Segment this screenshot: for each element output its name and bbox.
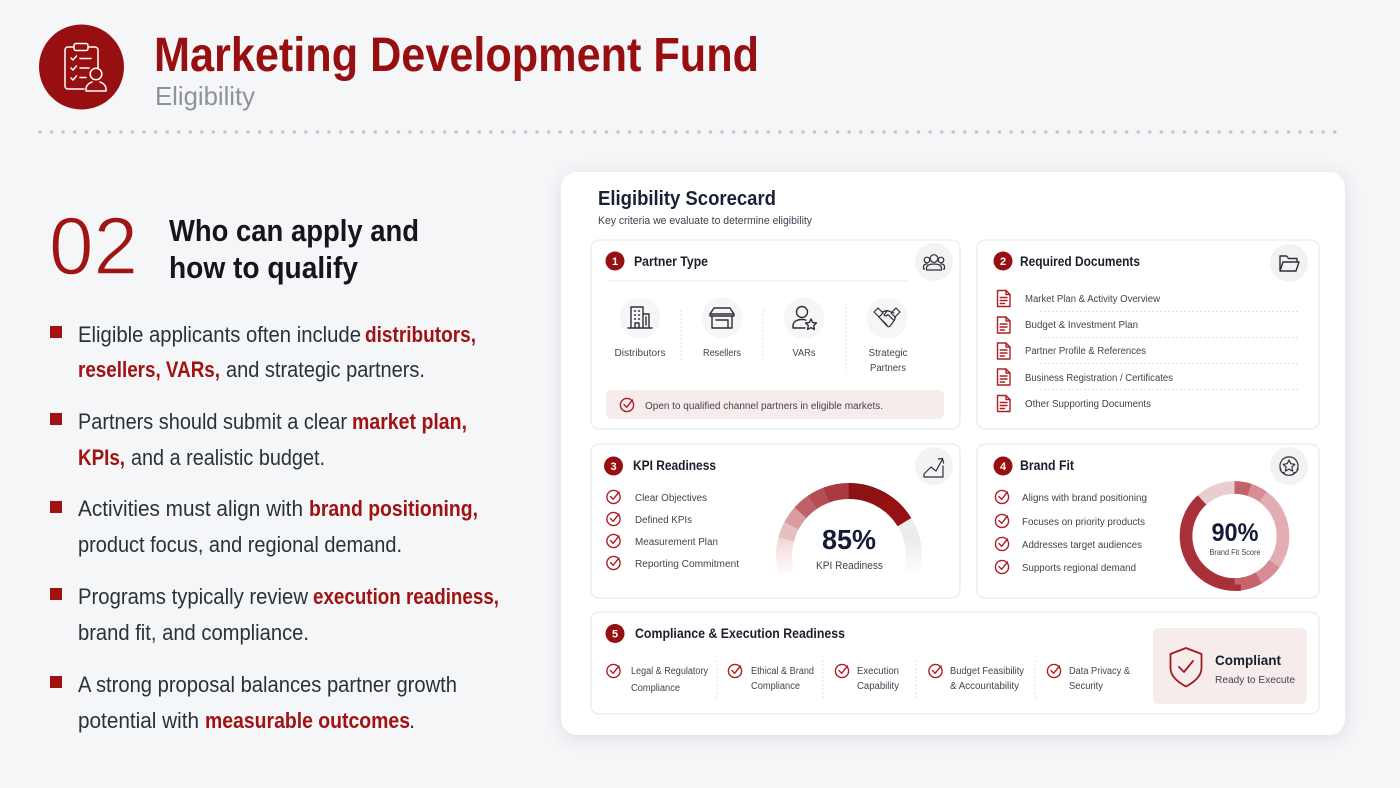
bullet 2: [50, 409, 467, 470]
bullet 5: A strong proposal balances partner growth: [78, 672, 457, 697]
document list: Partner Profile & References: [1025, 346, 1146, 357]
icon: folder: [1270, 244, 1308, 282]
badge 3: [604, 456, 623, 476]
panel: required documents: [977, 240, 1319, 429]
donut: 90% brand fit score: Brand Fit Score: [1210, 548, 1261, 557]
bullet 1: and strategic partners.: [226, 357, 425, 382]
bullet 2: KPIs,: [78, 445, 125, 470]
criterion: data privacy: [1047, 664, 1130, 692]
criterion: data privacy: Security: [1069, 681, 1103, 692]
bullet 1: [50, 322, 476, 382]
criterion: ethical and brand: Ethical & Brand: [751, 666, 814, 677]
bullet 4: Programs typically review: [78, 584, 308, 609]
bullet 4: execution readiness,: [313, 584, 499, 609]
partner: VARs: [784, 298, 824, 359]
badge 2: [994, 252, 1012, 270]
badge 5: [606, 624, 624, 643]
badge 3: 3: [610, 461, 617, 473]
panel: eligibility scorecard: [561, 172, 1345, 735]
partner: strategic partners: [866, 298, 908, 374]
badge 1: 1: [612, 256, 618, 268]
brand fit checklist: Addresses target audiences: [1022, 540, 1142, 551]
title: Marketing Development Fund: [154, 29, 759, 82]
brand fit checklist: [995, 490, 1147, 574]
KPI checklist: Measurement Plan: [635, 537, 718, 548]
badge 2: 2: [1000, 256, 1006, 268]
panel: brand fit: [977, 444, 1319, 598]
document list: Other Supporting Documents: [1025, 399, 1151, 410]
document list: [998, 290, 1173, 412]
bullet 5: measurable outcomes: [205, 708, 410, 733]
callout: compliant: [1153, 628, 1307, 704]
bullet 3: brand positioning,: [309, 496, 478, 521]
criterion: budget feasibility: Budget Feasibility: [950, 666, 1024, 677]
bullet 3: Activities must align with: [78, 496, 303, 521]
icon: shield: [1170, 648, 1202, 686]
brand fit checklist: Focuses on priority products: [1022, 517, 1145, 528]
brand fit checklist: Aligns with brand positioning: [1022, 493, 1147, 504]
partner: resellers: Resellers: [703, 348, 741, 359]
bullet 1: distributors,: [365, 322, 476, 347]
badge 4: 4: [1000, 461, 1007, 473]
badge 1: [606, 252, 624, 270]
bullet 3: product focus, and regional demand.: [78, 532, 402, 557]
criterion: legal and regulatory: Legal & Regulatory: [631, 666, 708, 677]
partner: strategic partners: Strategic: [868, 348, 908, 359]
criterion: budget feasibility: & Accountability: [950, 681, 1019, 692]
callout: open to qualified partners: [606, 390, 944, 419]
section heading: [169, 213, 419, 285]
required documents heading: Required Documents: [1020, 254, 1140, 269]
panel: KPI readiness: [591, 444, 960, 621]
criterion: ethical and brand: [728, 664, 814, 692]
section number: 02: [49, 201, 138, 292]
criterion: legal and regulatory: [607, 664, 708, 694]
partner: strategic partners: Partners: [870, 363, 906, 374]
scorecard subtitle: Key criteria we evaluate to determine eligibility: [598, 215, 812, 227]
bullet 2: and a realistic budget.: [131, 445, 325, 470]
section heading: how to qualify: [169, 250, 359, 285]
panel: partner type: [591, 240, 960, 429]
badge 5: 5: [612, 628, 618, 640]
bullet 4: brand fit, and compliance.: [78, 620, 309, 645]
donut: 90% brand fit score: 90%: [1212, 519, 1258, 547]
scorecard title: Eligibility Scorecard: [598, 188, 776, 210]
icon: star badge: [1270, 447, 1308, 485]
criterion: budget feasibility: [929, 664, 1024, 692]
subtitle: Eligibility: [155, 81, 255, 111]
icon: people: [915, 243, 953, 281]
bullet 2: Partners should submit a clear: [78, 409, 347, 434]
partner: distributors: Distributors: [614, 348, 666, 359]
criterion: execution capability: [835, 664, 899, 692]
document list: Budget & Investment Plan: [1025, 320, 1138, 331]
donut: 90% brand fit score: [1186, 488, 1283, 584]
bullet 5: potential with: [78, 708, 199, 733]
bullet 3: [50, 496, 478, 557]
KPI checklist: [607, 490, 739, 570]
header icon: clipboard with checklist and person: [39, 24, 124, 110]
criterion: ethical and brand: Compliance: [751, 681, 800, 692]
brand fit heading: Brand Fit: [1020, 458, 1074, 473]
bullet 1: Eligible applicants often include: [78, 322, 361, 347]
criterion: execution capability: Capability: [857, 681, 899, 692]
bullet 1: resellers, VARs,: [78, 357, 220, 382]
criterion: execution capability: Execution: [857, 666, 899, 677]
KPI checklist: Clear Objectives: [635, 493, 707, 504]
KPI readiness heading: KPI Readiness: [633, 458, 716, 473]
bullet list: [50, 322, 499, 733]
document list: Market Plan & Activity Overview: [1025, 294, 1161, 305]
brand fit checklist: Supports regional demand: [1022, 563, 1136, 574]
callout: open to qualified partners: Open to qualified channel partners in eligible markets.: [645, 401, 883, 412]
gauge: 85% KPI readiness: KPI Readiness: [816, 560, 883, 572]
icon: trend chart: [915, 447, 953, 485]
partner type heading: Partner Type: [634, 254, 708, 269]
KPI checklist: Defined KPIs: [635, 515, 692, 526]
badge 4: [994, 456, 1012, 476]
gauge: 85% KPI readiness: [770, 491, 928, 621]
panel: compliance and execution readiness: [591, 612, 1319, 714]
bullet 4: [50, 584, 499, 645]
partner: VARs: VARs: [792, 348, 816, 359]
callout: compliant: Compliant: [1215, 652, 1281, 668]
callout: compliant: Ready to Execute: [1215, 674, 1295, 686]
bullet 2: market plan,: [352, 409, 467, 434]
section heading: Who can apply and: [169, 213, 419, 248]
partner: resellers: [702, 298, 742, 359]
criterion: data privacy: Data Privacy &: [1069, 666, 1130, 677]
partner: distributors: [614, 298, 666, 359]
criterion: legal and regulatory: Compliance: [631, 683, 680, 694]
compliance heading: Compliance & Execution Readiness: [635, 626, 845, 641]
gauge: 85% KPI readiness: 85%: [822, 524, 876, 555]
bullet 5: .: [409, 708, 415, 733]
KPI checklist: Reporting Commitment: [635, 559, 739, 570]
bullet 5: [50, 672, 457, 733]
document list: Business Registration / Certificates: [1025, 373, 1173, 384]
